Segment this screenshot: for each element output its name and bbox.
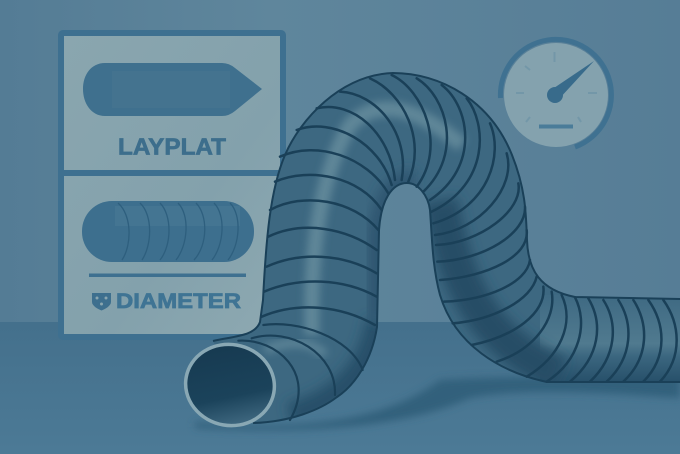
- gauge dial: [504, 43, 608, 147]
- icon: layflat hose: [83, 63, 262, 116]
- hose opening: [179, 337, 281, 433]
- gauge ticks: [516, 52, 597, 122]
- background wall: [0, 0, 680, 323]
- hose: [179, 73, 680, 433]
- gauge bar: [539, 124, 573, 128]
- diameter line: [89, 274, 246, 277]
- icon: pressure gauge: [500, 39, 611, 147]
- heading: layflat: LAYPLAT: [118, 134, 227, 160]
- floor: [0, 322, 680, 454]
- hose floor shadow: [195, 376, 680, 430]
- elbow ribs: [238, 324, 363, 420]
- panel divider: [61, 170, 283, 176]
- icon: shield: [92, 293, 111, 310]
- hose outline: [213, 73, 680, 423]
- panel: layflat and diameter card: [61, 33, 283, 337]
- gauge ring: [500, 39, 611, 147]
- hose body: [213, 73, 680, 423]
- hose shading: [265, 109, 680, 415]
- gauge needle: [551, 61, 594, 99]
- heading: diameter: DIAMETER: [116, 290, 241, 313]
- icon: round hose: [82, 201, 254, 262]
- hose ribs: [262, 75, 677, 382]
